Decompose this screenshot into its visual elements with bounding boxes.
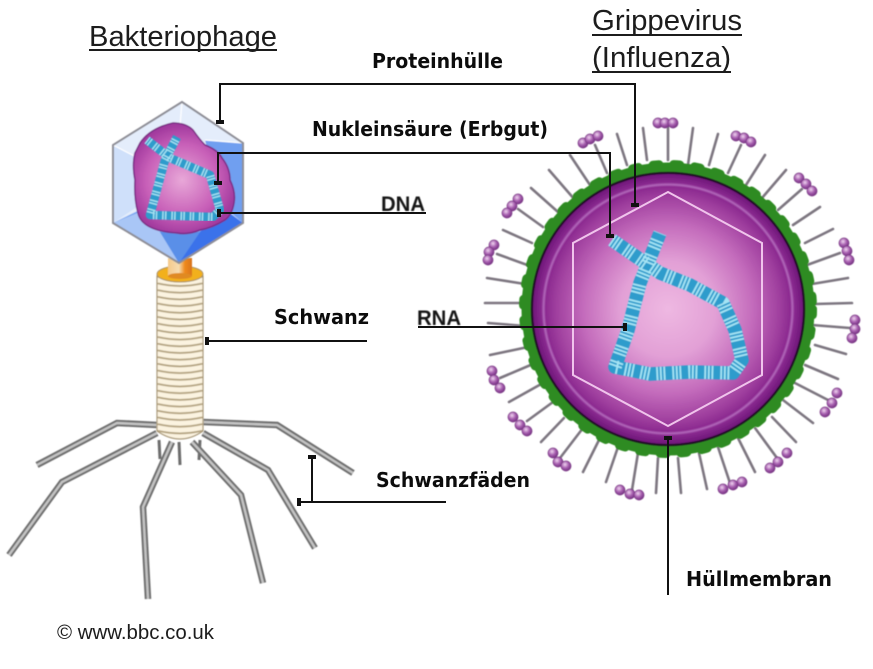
- bacteriophage illustration: [9, 102, 353, 599]
- callout: Hüllmembran: [664, 438, 672, 595]
- label: RNA: RNA: [417, 307, 461, 330]
- green envelope: [524, 164, 812, 454]
- label: Schwanz: Schwanz: [274, 305, 369, 329]
- label: Hüllmembran: Hüllmembran: [686, 567, 832, 591]
- callout: Schwanzfäden: [299, 457, 446, 506]
- tail sheath: [157, 258, 203, 439]
- tail fibres: [9, 422, 353, 599]
- callout: Schwanz: [207, 337, 367, 345]
- callout lines: [207, 84, 672, 595]
- callout: DNA: [218, 209, 426, 217]
- label: Proteinhülle: Proteinhülle: [372, 49, 503, 73]
- phage DNA: [147, 137, 220, 217]
- spike knobs: [483, 118, 860, 500]
- label: DNA: DNA: [381, 193, 425, 216]
- title: Grippevirus (Influenza): Grippevirus: [592, 5, 742, 37]
- influenza virus illustration: [483, 118, 860, 500]
- title: Grippevirus (Influenza): [592, 5, 742, 74]
- surface spikes: [485, 125, 852, 493]
- callout: RNA: [418, 323, 625, 331]
- RNA strand: [612, 233, 742, 374]
- callout: Proteinhülle: [216, 84, 639, 205]
- title: Grippevirus (Influenza): (Influenza): [592, 42, 731, 74]
- title: Bakteriophage: Bakteriophage: [89, 21, 277, 53]
- label: Schwanzfäden: Schwanzfäden: [376, 468, 530, 492]
- copyright source: © www.bbc.co.uk: [57, 622, 215, 644]
- purple capsule: [532, 173, 804, 445]
- callout: Nukleinsäure: [214, 153, 614, 236]
- label: Nukleinsäure (Erbgut): Nukleinsäure (Erbgut): [312, 117, 548, 141]
- head capsid: [113, 102, 243, 263]
- hexagon capsid: [573, 192, 762, 426]
